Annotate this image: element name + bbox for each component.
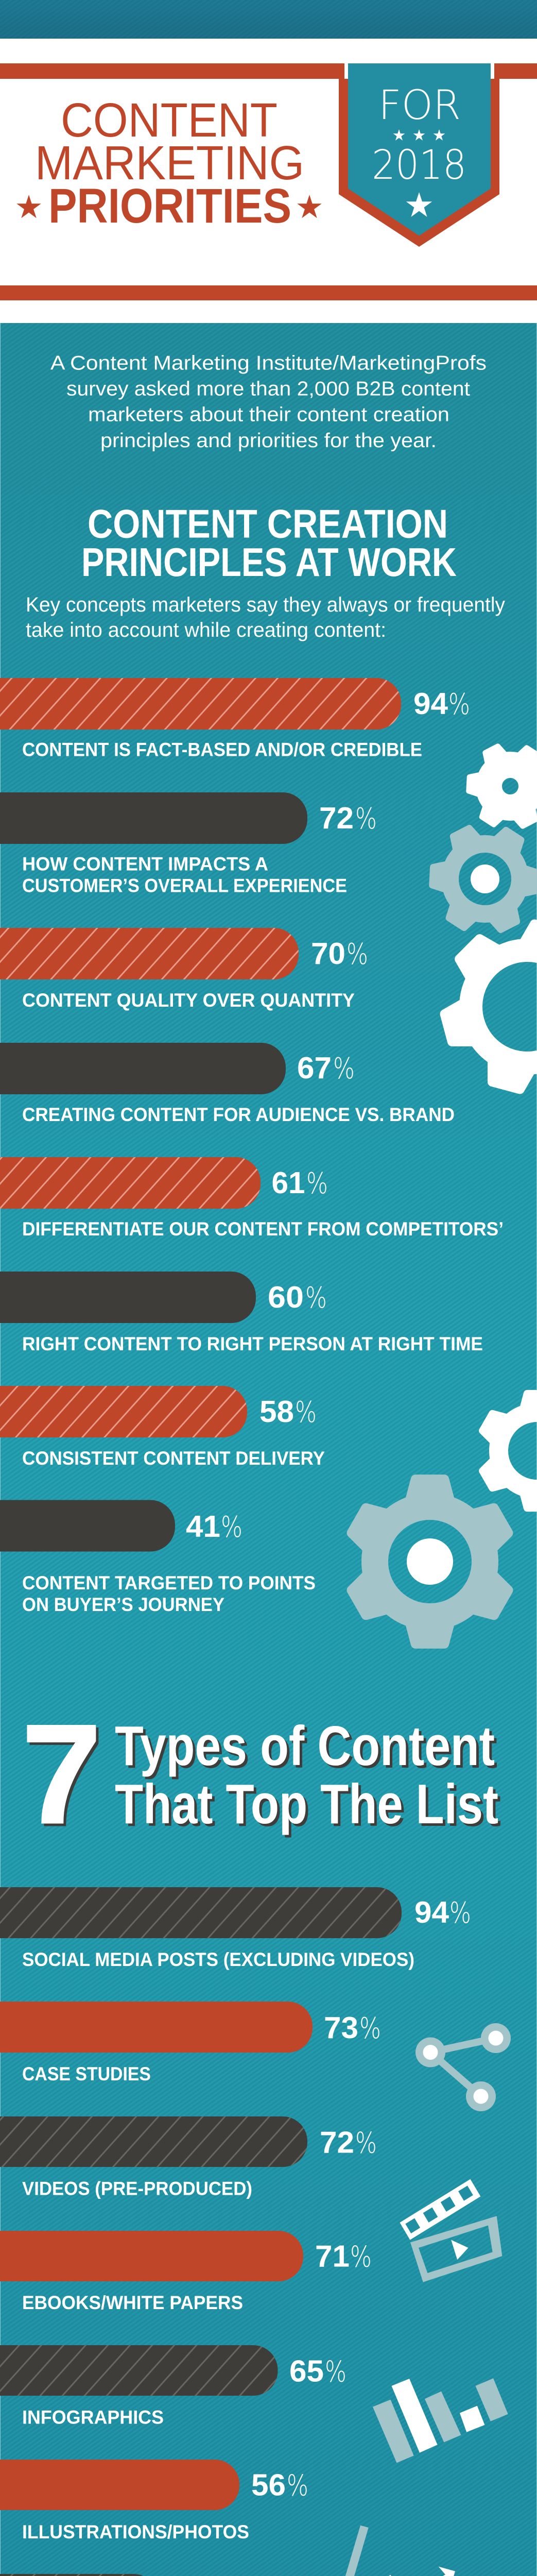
red band upper left <box>0 63 344 79</box>
row: 41% buyer's journey <box>0 1500 316 1615</box>
top striped band <box>0 0 537 39</box>
value 72%: % <box>355 2127 377 2160</box>
label: INFOGRAPHICS <box>22 2407 164 2428</box>
title: CONTENT <box>61 93 278 147</box>
intro text: survey asked more than 2,000 B2B content <box>66 378 470 400</box>
value 72%: % <box>355 802 377 836</box>
value 94%: % <box>449 1896 471 1930</box>
label: VIDEOS (PRE-PRODUCED) <box>22 2178 252 2199</box>
value 94%: 94 <box>413 687 448 721</box>
heading: 7 types of content: 7 <box>22 1696 101 1853</box>
bar 72% <box>0 792 307 844</box>
badge: for 2018: 2018 <box>372 142 466 189</box>
value 94% <box>414 1895 471 1930</box>
label: HOW CONTENT IMPACTS A <box>22 853 268 875</box>
heading: 7 types of content <box>22 1696 498 1853</box>
bar 94% <box>0 1887 402 1938</box>
value 41%: 41 <box>186 1510 220 1544</box>
bar 73% <box>0 2002 313 2053</box>
header panel <box>0 63 537 300</box>
value 67%: 67 <box>297 1051 332 1085</box>
label <box>22 1572 316 1615</box>
icon: white gear at right edge <box>459 1373 537 1529</box>
label: CASE STUDIES <box>22 2063 151 2084</box>
subheading: key concepts <box>26 594 505 641</box>
bar 58% <box>0 1386 247 1437</box>
bar 67% <box>0 1043 286 1094</box>
bar 71% <box>0 2231 303 2281</box>
value 65% <box>289 2354 347 2388</box>
label: CONSISTENT CONTENT DELIVERY <box>22 1448 325 1469</box>
value 73% <box>324 2011 381 2045</box>
icon: share <box>415 2023 511 2111</box>
icon: line chart <box>331 2526 455 2576</box>
value 56%: 56 <box>251 2468 286 2502</box>
badge: for 2018: FOR <box>378 82 461 129</box>
row: 72% customer experience <box>0 792 377 896</box>
value 70%: 70 <box>311 937 345 971</box>
value 60%: 60 <box>268 1280 304 1314</box>
intro text: A Content Marketing Institute/MarketingProfs <box>50 352 487 374</box>
row: 70% quality <box>0 928 368 1011</box>
value 60%: % <box>305 1281 327 1315</box>
row: 58% consistent <box>0 1386 325 1469</box>
red band upper right <box>494 63 537 79</box>
row: 37% research reports <box>0 2574 228 2576</box>
row: 61% differentiate <box>0 1157 504 1240</box>
value 58%: 58 <box>259 1395 294 1429</box>
badge: for 2018 <box>339 63 499 247</box>
label: ILLUSTRATIONS/PHOTOS <box>22 2521 249 2543</box>
heading: content creation principles: PRINCIPLES AT WORK <box>81 539 457 585</box>
icon: large gray gear <box>318 1450 537 1673</box>
value 72%: 72 <box>319 801 354 835</box>
bar 41% <box>0 1500 175 1552</box>
row: 65% infographics <box>0 2345 347 2428</box>
value 72%: 72 <box>320 2126 354 2160</box>
value 72% <box>319 801 377 836</box>
row: 60% right content <box>0 1272 483 1354</box>
label: EBOOKS/WHITE PAPERS <box>22 2292 243 2313</box>
label: ON BUYER’S JOURNEY <box>22 1594 224 1615</box>
row: 94% fact-based <box>0 678 470 760</box>
value 71% <box>315 2239 372 2274</box>
value 61%: 61 <box>272 1166 305 1200</box>
label <box>22 853 347 896</box>
bar 60% <box>0 1272 256 1323</box>
value 56% <box>251 2468 308 2503</box>
icon: small white gear <box>467 743 537 829</box>
value 72% <box>320 2126 377 2160</box>
subheading: key concepts: Key concepts marketers say they always or frequently <box>26 594 505 616</box>
row: 94% social media <box>0 1887 471 1970</box>
icon: video clapper <box>400 2179 502 2282</box>
value 41% <box>186 1510 242 1544</box>
title <box>16 93 322 233</box>
value 67%: % <box>333 1052 355 1086</box>
icon: gray gear <box>430 824 537 934</box>
value 94% <box>413 687 470 721</box>
intro text <box>50 352 487 452</box>
value 41%: % <box>221 1511 242 1544</box>
bar 72% <box>0 2116 307 2167</box>
value 67% <box>297 1051 355 1086</box>
value 58%: % <box>295 1396 317 1429</box>
label: RIGHT CONTENT TO RIGHT PERSON AT RIGHT TIME <box>22 1333 483 1354</box>
value 65%: % <box>325 2355 347 2388</box>
heading: content creation principles <box>81 501 457 585</box>
bar 61% <box>0 1157 261 1209</box>
intro text: marketers about their content creation <box>88 404 449 426</box>
label: CONTENT QUALITY OVER QUANTITY <box>22 990 355 1011</box>
title: PRIORITIES <box>48 179 291 233</box>
icon: tilted bar chart <box>373 2378 508 2463</box>
value 70%: % <box>347 938 368 971</box>
label: DIFFERENTIATE OUR CONTENT FROM COMPETITORS’ <box>22 1218 504 1240</box>
heading: content creation principles: CONTENT CREATION <box>88 501 448 546</box>
bar 94% <box>0 678 401 730</box>
value 70% <box>311 937 368 971</box>
row: 67% audience <box>0 1043 455 1125</box>
bar 56% <box>0 2460 239 2510</box>
row: 71% ebooks <box>0 2231 372 2313</box>
value 60% <box>268 1280 327 1315</box>
label: CONTENT TARGETED TO POINTS <box>22 1572 316 1594</box>
value 61% <box>272 1166 328 1200</box>
intro text: principles and priorities for the year. <box>100 430 437 452</box>
value 73%: 73 <box>324 2011 358 2045</box>
label: CREATING CONTENT FOR AUDIENCE VS. BRAND <box>22 1104 455 1125</box>
value 58% <box>259 1395 317 1429</box>
red band lower <box>0 285 537 300</box>
value 71%: 71 <box>315 2239 350 2273</box>
bar 70% <box>0 928 299 979</box>
row: 73% case studies <box>0 2002 381 2084</box>
label: SOCIAL MEDIA POSTS (EXCLUDING VIDEOS) <box>22 1949 414 1970</box>
row: 56% illustrations <box>0 2460 308 2543</box>
bar 65% <box>0 2345 278 2396</box>
value 71%: % <box>350 2240 372 2274</box>
title: MARKETING <box>35 136 304 190</box>
subheading: key concepts: take into account while creating content: <box>26 619 386 641</box>
value 94%: % <box>448 688 470 721</box>
value 56%: % <box>287 2469 308 2503</box>
value 94%: 94 <box>414 1895 449 1929</box>
row: 72% videos <box>0 2116 377 2199</box>
label: CONTENT IS FACT-BASED AND/OR CREDIBLE <box>22 739 422 760</box>
icon: large white gear <box>412 892 537 1122</box>
value 65%: 65 <box>289 2354 324 2388</box>
bar 37% <box>0 2574 158 2576</box>
value 73%: % <box>359 2012 381 2045</box>
value 61%: % <box>306 1167 328 1200</box>
label: CUSTOMER’S OVERALL EXPERIENCE <box>22 875 347 896</box>
